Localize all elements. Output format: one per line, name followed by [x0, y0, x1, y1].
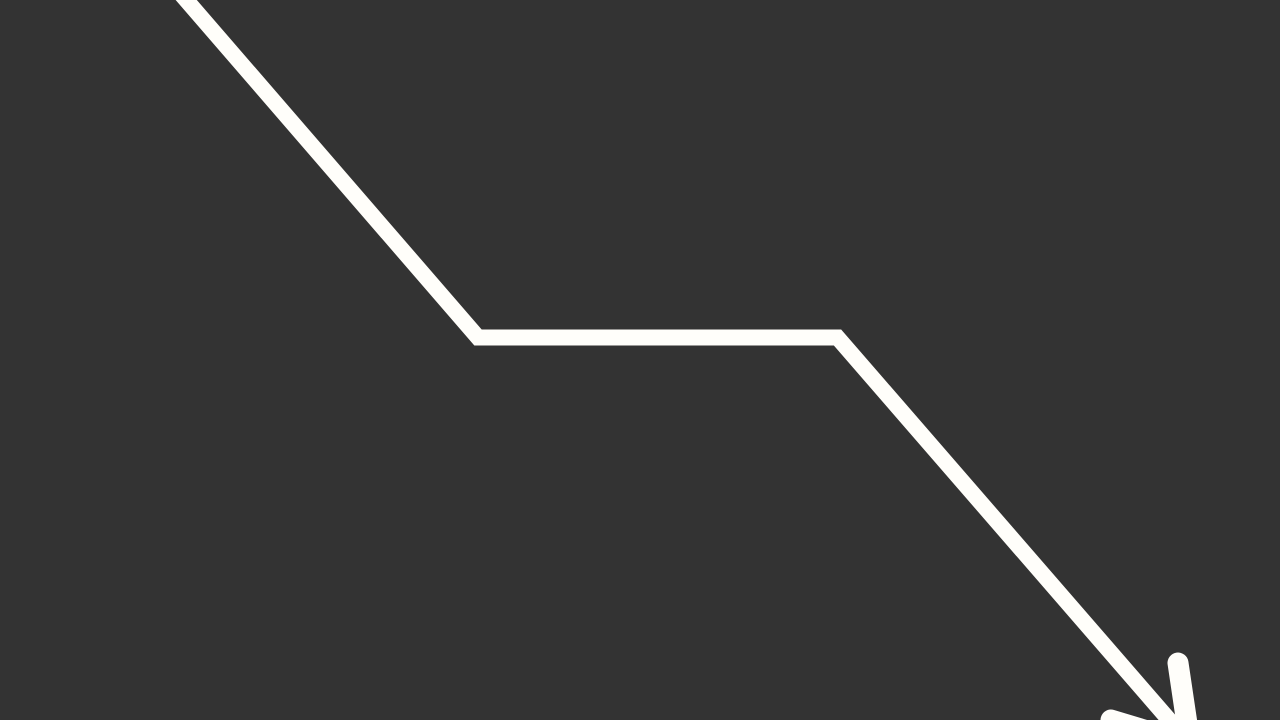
- arrow head: [1111, 663, 1190, 720]
- arrow: stepped downward trend: [178, 0, 1190, 720]
- arrow shaft: [178, 0, 1190, 720]
